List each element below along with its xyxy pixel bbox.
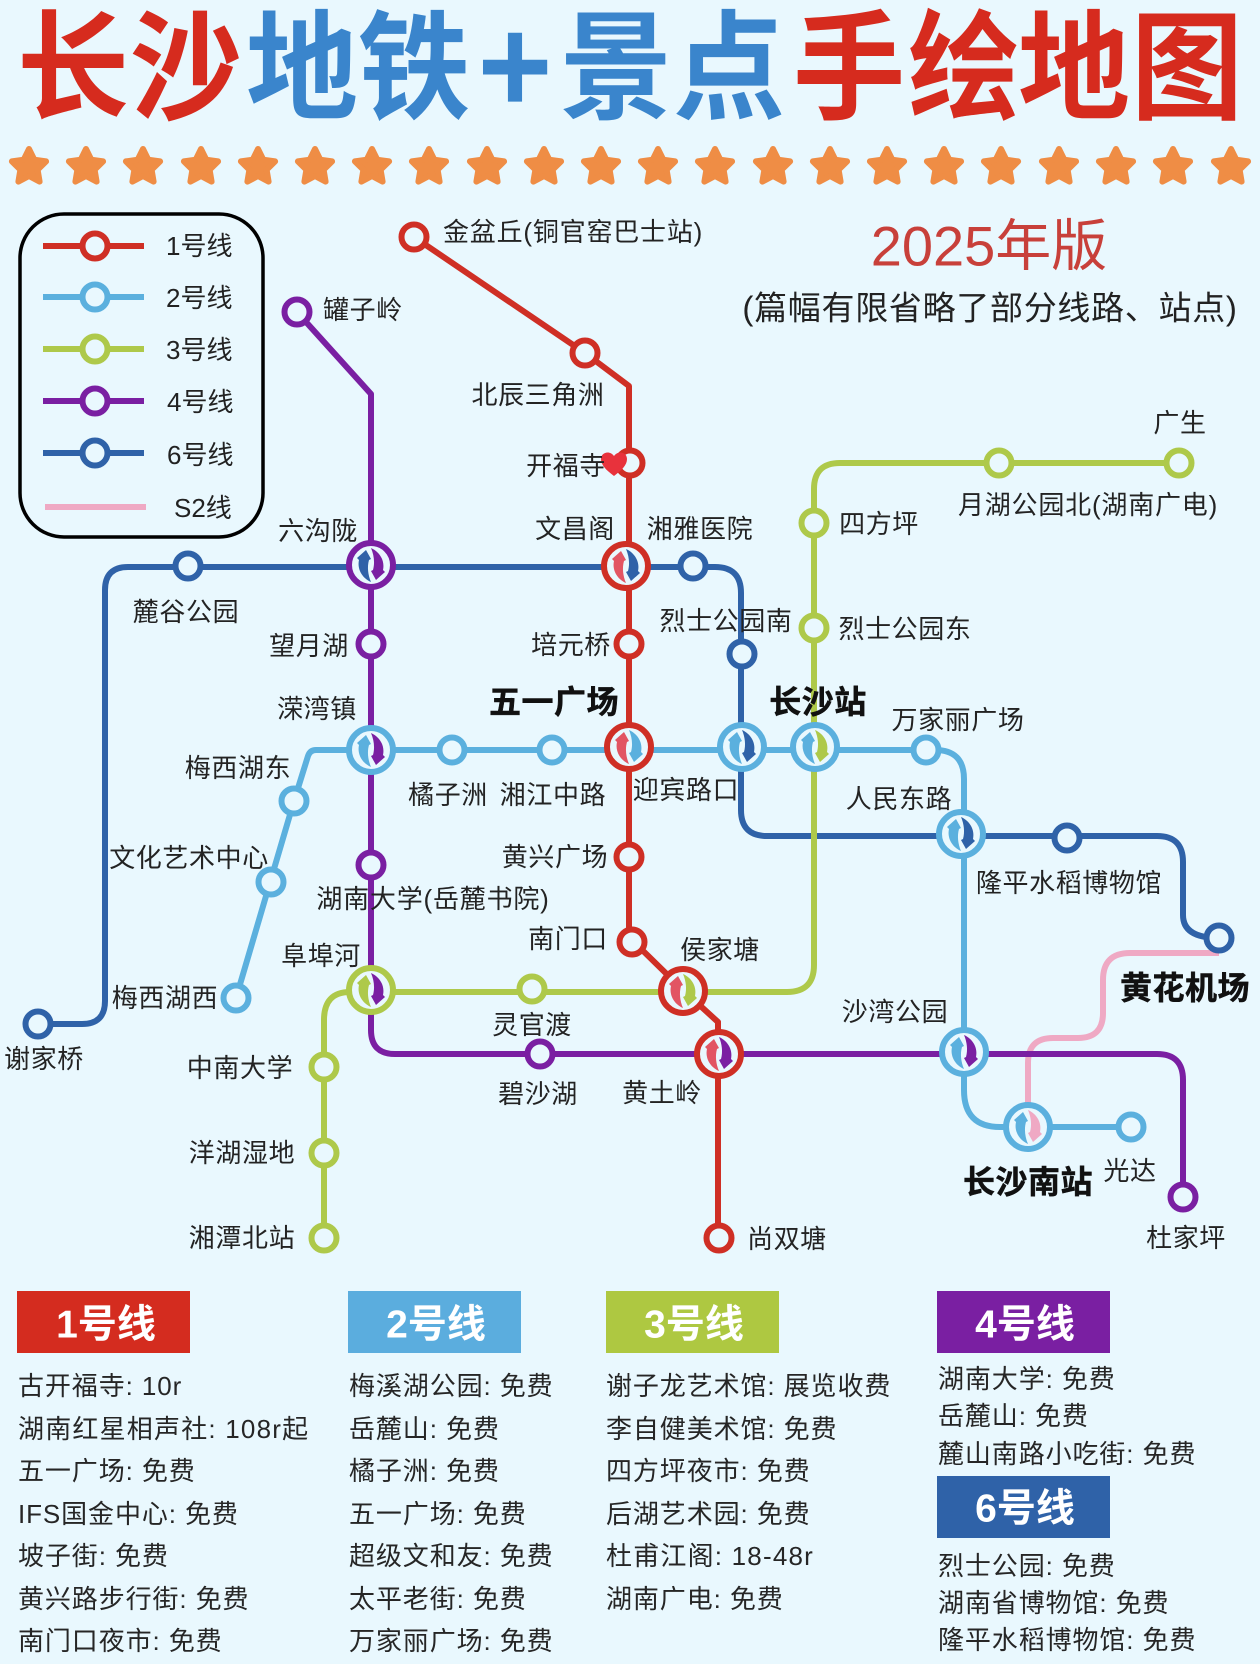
station labels: 侯家塘 [680, 935, 760, 965]
transfer station: 阜埠河 [349, 968, 393, 1012]
line 3 route [324, 463, 1179, 1238]
title: 绘 [908, 4, 1020, 136]
title: 景 [560, 4, 672, 136]
transfer station: 黄土岭 [697, 1032, 741, 1076]
station labels: 中南大学 [187, 1053, 293, 1083]
station labels: 杜家坪 [1146, 1223, 1226, 1253]
station labels: 万家丽广场 [891, 705, 1025, 735]
title [17, 0, 1243, 141]
line 3 stops [312, 450, 1192, 1250]
panel: line 6 attractions: 隆平水稻博物馆: 免费 [938, 1625, 1196, 1655]
transfer station: 沙湾公园 [942, 1030, 986, 1074]
line 6 stops [26, 554, 1232, 1036]
station labels: 四方坪 [839, 509, 919, 539]
panel: line 1 attractions: 1号线 [56, 1304, 156, 1346]
station labels: 阜埠河 [281, 941, 361, 971]
panel: line 1 attractions: 坡子街: 免费 [18, 1541, 169, 1571]
title: 图 [1131, 4, 1243, 136]
station labels: 洋湖湿地 [189, 1138, 295, 1168]
station labels: 南门口 [528, 924, 608, 954]
panel: line 2 attractions: 超级文和友: 免费 [349, 1541, 554, 1571]
line 2 route [236, 750, 1131, 1127]
station labels: 光达 [1103, 1156, 1157, 1186]
panel: line 3 attractions: 3号线 [644, 1304, 744, 1346]
line 2 stops [224, 738, 1144, 1140]
panel: line 3 attractions [606, 1291, 891, 1614]
station labels: 黄花机场 [1120, 970, 1250, 1006]
S2 line [1028, 953, 1219, 1127]
legend: 6号线 [167, 440, 233, 470]
line 1 stops [402, 224, 732, 1250]
panel: line 3 attractions: 后湖艺术园: 免费 [606, 1499, 811, 1529]
station labels: 长沙站 [769, 684, 867, 720]
row of orange stars [12, 149, 1248, 182]
station labels: 罐子岭 [323, 295, 403, 325]
station labels: 橘子洲 [408, 780, 488, 810]
station labels: 开福寺 [526, 451, 606, 481]
panel: line 2 attractions: 五一广场: 免费 [349, 1499, 527, 1529]
station labels: 迎宾路口 [633, 775, 739, 805]
title: 点 [673, 4, 785, 136]
panel: line 6 attractions [937, 1476, 1196, 1655]
legend: 1号线 [166, 231, 232, 261]
panel: line 2 attractions: 2号线 [386, 1304, 486, 1346]
panel: line 4 attractions: 4号线 [975, 1304, 1075, 1346]
panel: line 4 attractions: 岳麓山: 免费 [938, 1401, 1089, 1431]
legend [20, 214, 263, 537]
title: 铁 [358, 4, 470, 136]
title: 沙 [130, 4, 242, 136]
panel: line 1 attractions: 黄兴路步行街: 免费 [18, 1584, 249, 1614]
panel: line 1 attractions: 古开福寺: 10r [18, 1371, 182, 1401]
panel: line 4 attractions: 麓山南路小吃街: 免费 [938, 1439, 1196, 1469]
line 4 stops [284, 300, 1196, 1210]
edition note: (篇幅有限省略了部分线路、站点) [742, 290, 1238, 326]
panel: line 6 attractions: 烈士公园: 免费 [938, 1551, 1116, 1581]
station labels: 湘江中路 [500, 780, 606, 810]
transfer station: 溁湾镇 [349, 728, 393, 772]
station labels [4, 217, 1250, 1254]
title: 地 [1018, 4, 1130, 136]
panel: line 3 attractions: 湖南广电: 免费 [606, 1584, 784, 1614]
panel: line 2 attractions [348, 1291, 554, 1656]
transfer station: 人民东路 [939, 812, 983, 856]
transfer station: 侯家塘 [661, 969, 705, 1013]
title: 长 [17, 4, 129, 136]
station labels: 北辰三角洲 [471, 380, 605, 410]
line 4 route [297, 312, 1183, 1197]
station labels: 梅西湖东 [185, 753, 291, 783]
station labels: 湘雅医院 [647, 514, 753, 544]
station labels: 灵官渡 [492, 1010, 572, 1040]
legend: 4号线 [167, 387, 233, 417]
panel: line 1 attractions: 南门口夜市: 免费 [18, 1626, 223, 1656]
edition note [742, 214, 1238, 326]
legend: 3号线 [166, 335, 232, 365]
panel: line 3 attractions: 四方坪夜市: 免费 [606, 1456, 811, 1486]
panel: line 2 attractions: 橘子洲: 免费 [349, 1456, 500, 1486]
station labels: 文化艺术中心 [109, 843, 269, 873]
station labels: 培元桥 [531, 630, 611, 660]
legend: 2号线 [166, 283, 232, 313]
line 6 route [38, 567, 1219, 1024]
panel: line 3 attractions: 李自健美术馆: 免费 [606, 1414, 837, 1444]
station labels: 五一广场 [489, 684, 619, 720]
station labels: 月湖公园北(湖南广电) [958, 490, 1218, 520]
title: 地 [246, 4, 358, 136]
panel: line 1 attractions: IFS国金中心: 免费 [18, 1499, 239, 1529]
panel: line 1 attractions [17, 1291, 309, 1656]
transfer station: 文昌阁 [604, 544, 648, 588]
station labels: 烈士公园南 [659, 606, 793, 636]
station labels: 六沟陇 [278, 516, 358, 546]
station labels: 尚双塘 [747, 1224, 827, 1254]
station labels: 烈士公园东 [838, 614, 972, 644]
panel: line 6 attractions: 湖南省博物馆: 免费 [938, 1588, 1169, 1618]
panel: line 2 attractions: 万家丽广场: 免费 [349, 1626, 554, 1656]
station labels: 谢家桥 [4, 1044, 84, 1074]
metro map [4, 217, 1250, 1254]
transfer station: 长沙站 [793, 725, 837, 769]
panel: line 1 attractions: 五一广场: 免费 [18, 1456, 196, 1486]
station labels: 隆平水稻博物馆 [976, 868, 1162, 898]
transfer station: 五一广场 [607, 725, 651, 769]
station labels: 文昌阁 [535, 514, 615, 544]
panel: line 3 attractions: 谢子龙艺术馆: 展览收费 [606, 1371, 891, 1401]
panel: line 4 attractions: 湖南大学: 免费 [938, 1364, 1116, 1394]
station labels: 沙湾公园 [842, 997, 948, 1027]
edition note: 2025年版 [871, 214, 1107, 278]
station labels: 湖南大学(岳麓书院) [316, 884, 550, 914]
station labels: 湘潭北站 [189, 1223, 295, 1253]
panel: line 2 attractions: 梅溪湖公园: 免费 [349, 1371, 554, 1401]
panel: line 2 attractions: 太平老街: 免费 [349, 1584, 527, 1614]
panel: line 1 attractions: 湖南红星相声社: 108r起 [18, 1414, 309, 1444]
line 1 route [414, 237, 718, 1238]
legend: S2线 [174, 493, 232, 523]
station labels: 麓谷公园 [133, 597, 239, 627]
station labels: 碧沙湖 [498, 1079, 578, 1109]
station labels: 金盆丘(铜官窑巴士站) [443, 217, 703, 247]
station labels: 黄土岭 [622, 1078, 702, 1108]
station labels: 黄兴广场 [502, 842, 608, 872]
title: 手 [793, 4, 905, 136]
station labels: 溁湾镇 [277, 694, 357, 724]
station labels: 望月湖 [269, 631, 349, 661]
icon: red heart at Kaifu Temple [601, 452, 627, 476]
panel: line 3 attractions: 杜甫江阁: 18-48r [606, 1541, 814, 1571]
transfer station: 长沙南站 [1006, 1105, 1050, 1149]
panel: line 2 attractions: 岳麓山: 免费 [349, 1414, 500, 1444]
panel: line 6 attractions: 6号线 [975, 1488, 1075, 1530]
station labels: 人民东路 [846, 784, 952, 814]
transfer station: 迎宾路口 [720, 725, 764, 769]
station labels: 广生 [1153, 408, 1207, 438]
station labels: 长沙南站 [963, 1164, 1093, 1200]
station labels: 梅西湖西 [112, 983, 218, 1013]
transfer station: 六沟陇 [349, 543, 393, 587]
panel: line 4 attractions [937, 1291, 1196, 1469]
